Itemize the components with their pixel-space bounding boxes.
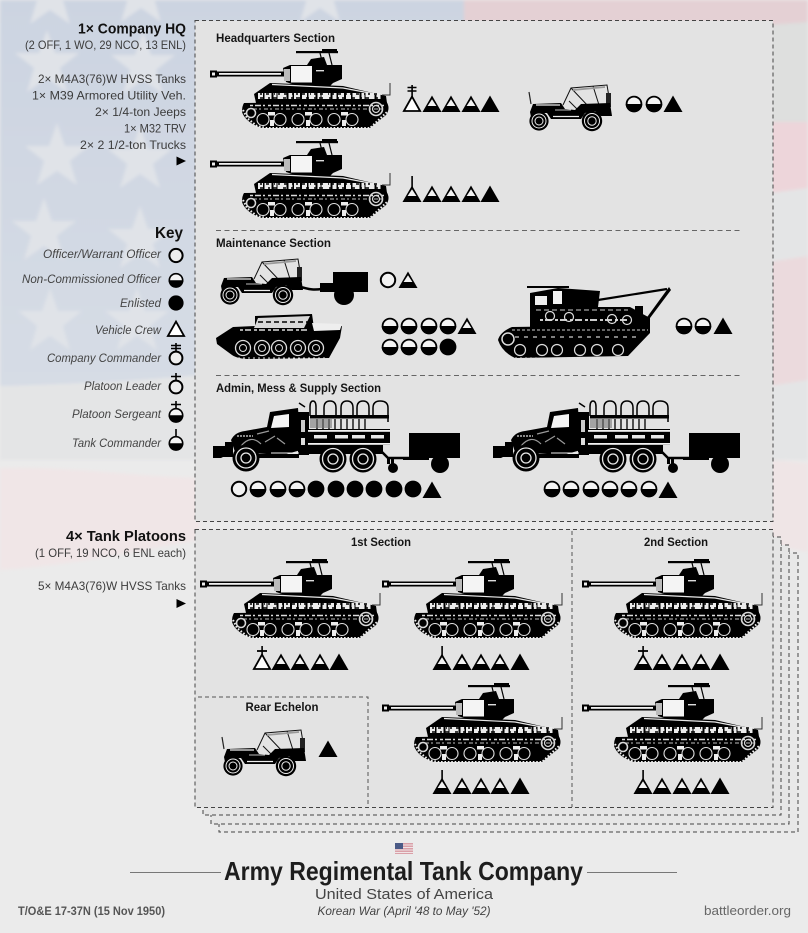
- arrow: HQ: [176, 156, 186, 166]
- icon: US flag: [395, 843, 413, 854]
- reference: T/O&E 17-37N (15 Nov 1950): [18, 904, 165, 918]
- text: platoon strength: (1 OFF, 19 NCO, 6 ENL each): [35, 546, 186, 560]
- text: HQ strength: (2 OFF, 1 WO, 29 NCO, 13 ENL): [25, 38, 186, 52]
- personnel: platoon sergeant crew: [634, 646, 730, 670]
- personnel: HQ jeep crew: [626, 96, 682, 112]
- personnel: maintenance jeep crew: [381, 272, 418, 288]
- legend entry: Vehicle Crew: [95, 322, 184, 337]
- legend entry: Company Commander: Company Commander: [47, 353, 162, 365]
- legend: key: [22, 225, 184, 451]
- arrow: platoons: [176, 599, 186, 608]
- legend entry: Vehicle Crew: Vehicle Crew: [95, 325, 162, 337]
- personnel: HQ tank 2 crew: [402, 176, 500, 202]
- text: HQ vehicle list: 2× 1/4-ton Jeeps: [95, 105, 186, 119]
- vehicle: HQ tank 1: [210, 49, 390, 128]
- text: HQ vehicle list: 1× M39 Armored Utility Veh.: [32, 88, 186, 102]
- text: HQ vehicle list: 1× M32 TRV: [124, 122, 186, 136]
- vehicle: 1st section tank 2: [382, 559, 562, 638]
- panel: tank platoon: [195, 530, 773, 808]
- legend entry: Platoon Leader: Platoon Leader: [84, 381, 162, 393]
- vehicle: truck 1 with trailer: [213, 401, 460, 473]
- source: battleorder.org: [704, 903, 791, 918]
- heading: Rear Echelon: Rear Echelon: [246, 700, 318, 714]
- personnel: truck 2 crew: [544, 482, 678, 498]
- personnel: truck 1 crew: [232, 481, 442, 498]
- heading: 2nd Section: 2nd Section: [644, 535, 708, 549]
- vehicle: HQ tank 2: [210, 139, 390, 218]
- vehicle: rear echelon jeep: [222, 730, 306, 776]
- period: Korean War (April '48 to May '52): [318, 904, 490, 918]
- heading: 1st Section: 1st Section: [351, 535, 411, 549]
- legend entry: Platoon Sergeant: Platoon Sergeant: [72, 409, 162, 421]
- legend entry: Platoon Sergeant: [72, 401, 183, 423]
- personnel: rear echelon driver: [318, 740, 338, 757]
- text: HQ vehicle list: 2× 2 1/2-ton Trucks: [80, 138, 186, 152]
- panel: stacked platoon sheet 4: [219, 553, 798, 832]
- vehicle: HQ jeep: [529, 85, 612, 131]
- heading: 1x Company HQ: 1× Company HQ: [78, 20, 186, 38]
- text: platoon vehicle list: 5× M4A3(76)W HVSS Tanks: [38, 579, 186, 593]
- vehicle: M39 armored utility vehicle: [216, 314, 342, 359]
- subtitle: United States of America: [315, 886, 494, 903]
- panel: stacked platoon sheet 3: [211, 545, 789, 824]
- personnel: platoon leader crew: [254, 646, 348, 670]
- text: HQ vehicle list: 2× M4A3(76)W HVSS Tanks: [38, 72, 186, 86]
- heading: Headquarters Section: Headquarters Section: [216, 31, 335, 45]
- vehicle: 2nd section tank 2: [582, 683, 762, 762]
- legend entry: Officer/Warrant Officer: Officer/Warrant Officer: [43, 249, 162, 261]
- legend entry: Tank Commander: [72, 429, 183, 451]
- personnel: 2nd section tank 2 crew: [634, 770, 730, 794]
- vehicle: 1st section tank 1: [200, 559, 380, 638]
- heading: Key: Key: [155, 225, 183, 242]
- panel: stacked platoon sheet 2: [203, 537, 781, 815]
- personnel: M39 crew: [382, 318, 476, 355]
- personnel: tank 3 crew: [432, 770, 530, 794]
- personnel: HQ tank 1 crew: [404, 85, 500, 112]
- legend entry: Platoon Leader: [84, 373, 182, 393]
- personnel: M32 crew: [676, 318, 732, 334]
- vehicle: truck 2 with trailer: [493, 401, 740, 473]
- legend entry: Tank Commander: Tank Commander: [72, 438, 162, 450]
- title: Army Regimental Tank Company: [224, 856, 583, 886]
- text: HQ vehicle list: [32, 72, 186, 152]
- sidebar: tank platoon summary: [35, 528, 186, 593]
- legend entry: Company Commander: [47, 343, 182, 365]
- panel: company HQ: [195, 20, 773, 522]
- vehicle: 2nd section tank 1: [582, 559, 762, 638]
- footer title block: [18, 856, 791, 918]
- vehicle: maintenance jeep with trailer: [220, 259, 368, 305]
- heading: Maintenance Section: Maintenance Section: [216, 236, 331, 250]
- legend entry: Enlisted: Enlisted: [120, 298, 162, 310]
- heading: Admin, Mess & Supply Section: Admin, Mess & Supply Section: [216, 381, 381, 395]
- heading: 4x Tank Platoons: 4× Tank Platoons: [66, 528, 186, 545]
- legend entry: Enlisted: [120, 295, 184, 311]
- personnel: tank 2 crew: [432, 646, 530, 670]
- vehicle: 1st section tank 3: [382, 683, 562, 762]
- sidebar: company HQ summary: [25, 20, 186, 152]
- vehicle: M32 tank recovery vehicle: [498, 286, 671, 358]
- legend entry: Non-Commissioned Officer: Non-Commissioned Officer: [22, 274, 162, 286]
